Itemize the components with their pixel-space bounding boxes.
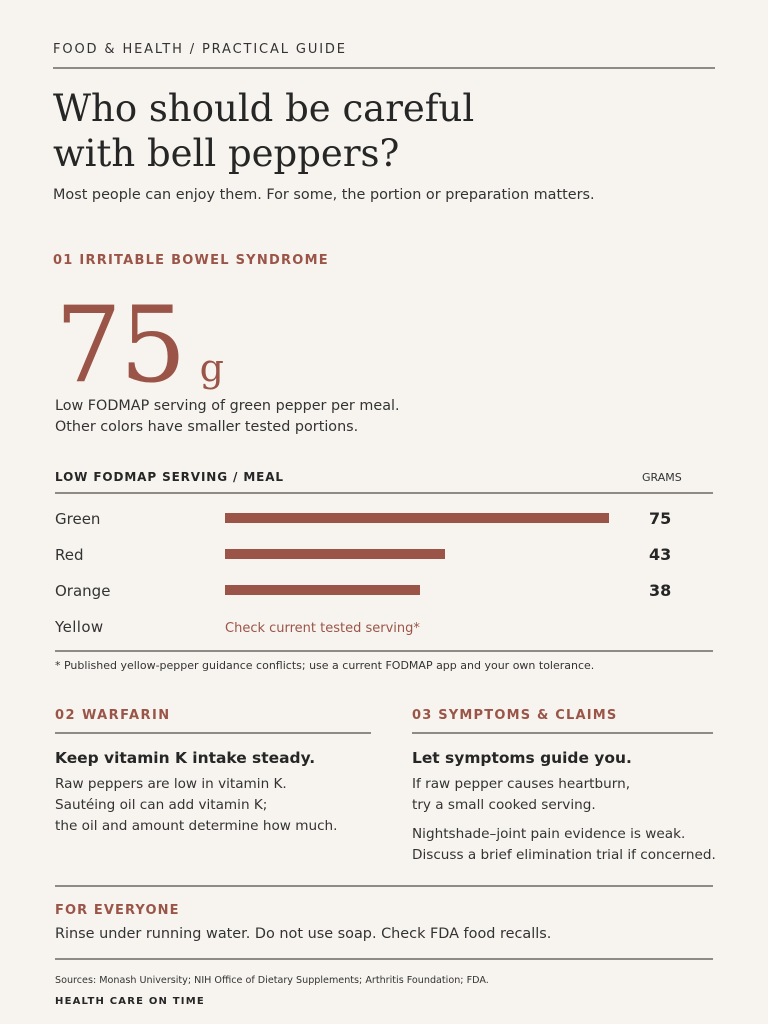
- yellow note: Check current tested serving*: [225, 621, 420, 636]
- title: [53, 87, 474, 175]
- warfarin text: the oil and amount determine how much.: [55, 818, 337, 834]
- section heading: IBS: 01 IRRITABLE BOWEL SYNDROME: [53, 253, 329, 268]
- section heading: Symptoms and claims: 03 SYMPTOMS & CLAIMS: [412, 708, 618, 723]
- section heading: Warfarin: 02 WARFARIN: [55, 708, 171, 723]
- symptoms heading: Let symptoms guide you.: [412, 749, 632, 767]
- value: 38: 38: [649, 581, 671, 600]
- bar: Orange 38: [225, 585, 420, 595]
- title: with bell peppers?: [53, 132, 399, 175]
- big stat: 75 g: 75 g: [55, 284, 224, 406]
- stat description: [55, 398, 400, 435]
- row label: Orange: Orange: [55, 582, 110, 600]
- warfarin text: Sautéing oil can add vitamin K;: [55, 797, 267, 813]
- bar: Red 43: [225, 549, 445, 559]
- symptoms text: try a small cooked serving.: [412, 797, 596, 813]
- panel: bar chart: [55, 470, 713, 652]
- everyone text: Rinse under running water. Do not use soap. Check FDA food recalls.: [55, 926, 551, 942]
- panel: warfarin: [55, 708, 371, 834]
- claims text: Discuss a brief elimination trial if concerned.: [412, 847, 716, 863]
- value: 75: 75: [649, 509, 671, 528]
- footer brand: HEALTH CARE ON TIME: [55, 996, 205, 1007]
- symptoms text: If raw pepper causes heartburn,: [412, 776, 630, 792]
- header kicker: FOOD & HEALTH / PRACTICAL GUIDE: [53, 42, 347, 57]
- stat description: Other colors have smaller tested portions.: [55, 419, 358, 435]
- panel: symptoms and claims: [412, 708, 716, 863]
- chart footnote: * Published yellow-pepper guidance conflicts; use a current FODMAP app and your own tolerance.: [55, 659, 594, 672]
- claims text: Nightshade–joint pain evidence is weak.: [412, 826, 685, 842]
- symptoms text: [412, 776, 630, 813]
- sources: Sources: Monash University; NIH Office of Dietary Supplements; Arthritis Foundation; FDA.: [55, 975, 489, 986]
- stat description: Low FODMAP serving of green pepper per meal.: [55, 398, 400, 414]
- warfarin text: [55, 776, 337, 834]
- row label: Red: Red: [55, 546, 84, 564]
- chart unit label: GRAMS: [642, 471, 682, 484]
- bar: Green 75: [225, 513, 609, 523]
- chart heading: LOW FODMAP SERVING / MEAL: [55, 470, 284, 484]
- subtitle: Most people can enjoy them. For some, the portion or preparation matters.: [53, 187, 595, 203]
- warfarin text: Raw peppers are low in vitamin K.: [55, 776, 287, 792]
- section heading: For everyone: FOR EVERYONE: [55, 903, 180, 918]
- claims text: [412, 826, 716, 863]
- value: 43: 43: [649, 545, 671, 564]
- title: Who should be careful: [53, 87, 474, 130]
- row label: Yellow: Yellow: [55, 618, 104, 636]
- row label: Green: Green: [55, 510, 100, 528]
- warfarin heading: Keep vitamin K intake steady.: [55, 749, 315, 767]
